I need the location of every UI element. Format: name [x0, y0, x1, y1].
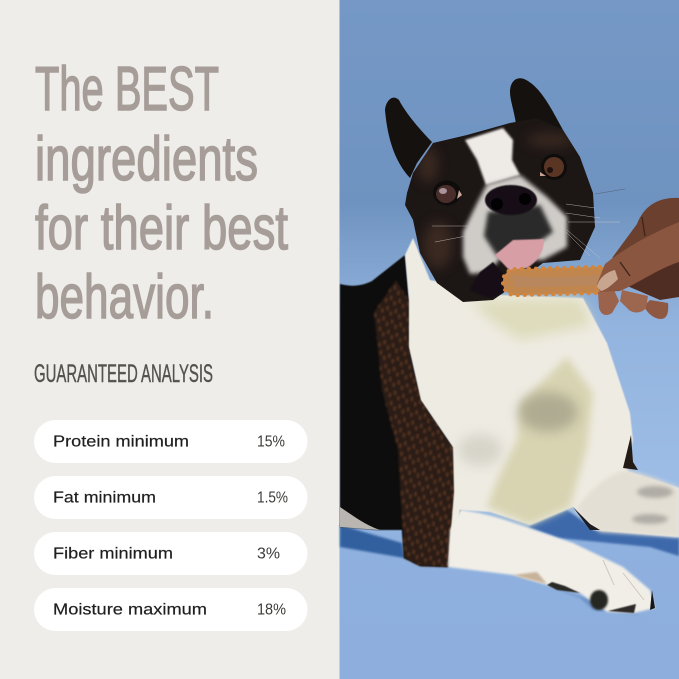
- left ear: [385, 98, 432, 178]
- under chin tint: [470, 298, 592, 340]
- headline: The BEST: [35, 55, 219, 124]
- dog chest shadow: [487, 357, 593, 525]
- left eye: [433, 180, 462, 206]
- head: [405, 118, 595, 302]
- right leg: [575, 470, 679, 537]
- knuckle creases: [620, 217, 645, 276]
- headline: behavior.: [35, 263, 214, 332]
- paw details: [513, 560, 655, 613]
- index finger: [612, 198, 679, 258]
- nose: [485, 185, 537, 215]
- dark muzzle centre: [484, 205, 553, 256]
- dog chest gray tone: [518, 392, 578, 432]
- headline: for their best: [35, 194, 288, 263]
- thumb: [597, 222, 679, 292]
- hand: [597, 198, 679, 319]
- lower finger 3: [644, 300, 668, 319]
- right eye: [540, 154, 567, 180]
- row: fiber minimum: Fiber minimum: [53, 546, 173, 562]
- thumb nail: [597, 270, 618, 291]
- headline: [35, 55, 288, 332]
- right ear: [510, 78, 563, 130]
- white blaze: [465, 128, 520, 185]
- dog body: brown brindle: [374, 280, 460, 567]
- row: protein minimum: [34, 420, 308, 463]
- dog body: white back patch: [340, 507, 380, 530]
- brown forehead tones: [418, 133, 574, 269]
- row: fat minimum: Fat minimum: [53, 490, 156, 506]
- front leg: [448, 510, 655, 613]
- illustration: dog and treat: [340, 78, 679, 615]
- row: moisture maximum: [34, 588, 308, 631]
- lower jaw: [470, 262, 504, 298]
- row: fiber minimum: [34, 532, 308, 575]
- panel: blue photo background: [340, 0, 679, 679]
- dark patch at rear elbow: [623, 435, 638, 470]
- dog body: white chest and legs: [405, 238, 679, 567]
- headline: ingredients: [35, 125, 258, 194]
- treat: [503, 267, 615, 295]
- lower finger 1: [598, 290, 619, 315]
- row: protein minimum: 15%: [257, 434, 285, 450]
- muzzle: [463, 175, 567, 274]
- palm shadow: [625, 255, 679, 300]
- dog body: dark coat: [340, 255, 460, 567]
- subheading: guaranteed analysis: GUARANTEED ANALYSIS: [34, 360, 213, 388]
- row: moisture maximum: Moisture maximum: [53, 602, 207, 618]
- nostrils: [491, 193, 531, 210]
- row: protein minimum: Protein minimum: [53, 434, 189, 450]
- chest fold grey: [458, 434, 502, 466]
- panel: left background: [0, 0, 340, 679]
- row: fat minimum: 1.5%: [257, 490, 288, 506]
- table: guaranteed analysis rows: [34, 420, 308, 631]
- row: fat minimum: [34, 476, 308, 519]
- lower finger 2: [620, 290, 648, 312]
- row: moisture maximum: 18%: [257, 602, 286, 618]
- floor shadows: [340, 510, 679, 615]
- right leg markings: [632, 486, 673, 524]
- tongue: [495, 239, 544, 271]
- whiskers: [432, 189, 625, 258]
- row: fiber minimum: 3%: [257, 546, 280, 562]
